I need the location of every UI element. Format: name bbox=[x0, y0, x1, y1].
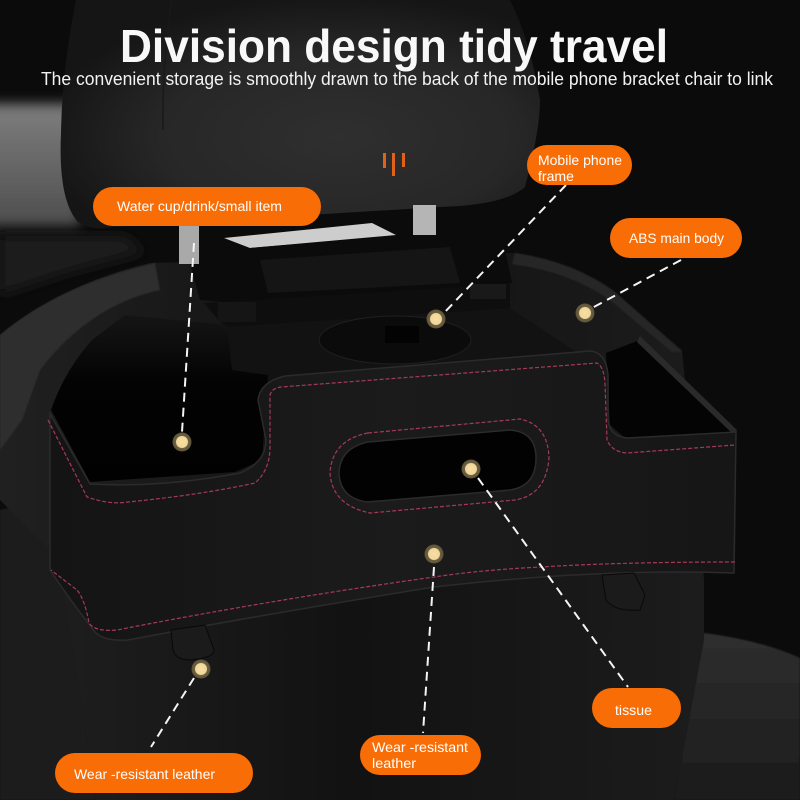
tissue slot bbox=[330, 419, 549, 513]
subtitle: The convenient storage is smoothly drawn to the back of the mobile phone bracket chair to link bbox=[41, 69, 774, 89]
callout: ABS main body bbox=[610, 218, 742, 258]
callout: ABS main body: ABS main body bbox=[629, 230, 724, 246]
marker dots bbox=[172, 304, 594, 678]
seat back bbox=[0, 253, 704, 800]
stitching bbox=[48, 363, 735, 630]
callout: mobile phone frame bbox=[527, 145, 632, 185]
callout: mobile phone frame: frame bbox=[538, 168, 574, 184]
hanging hooks bbox=[171, 573, 645, 660]
phone frame platform and dial bbox=[227, 308, 578, 400]
callout: tissue bbox=[592, 688, 681, 728]
callout: mobile phone frame: Mobile phone bbox=[538, 152, 622, 168]
phone bracket and headrest posts bbox=[135, 205, 512, 328]
headrest bbox=[61, 0, 540, 229]
callout: water cup: Water cup/drink/small item bbox=[117, 198, 282, 214]
callout: wear-resistant leather, left bbox=[55, 753, 253, 793]
callout: tissue: tissue bbox=[615, 702, 652, 718]
callout: wear-resistant leather, centre: leather bbox=[372, 755, 416, 771]
title: Division design tidy travel bbox=[120, 20, 668, 72]
callout: wear-resistant leather, centre bbox=[360, 735, 481, 775]
organizer: left cup and right cup interior bbox=[51, 315, 737, 482]
organizer: leather front panel bbox=[48, 351, 736, 640]
callout: wear-resistant leather, centre: Wear -resistant bbox=[372, 739, 468, 755]
logo mark on headrest bbox=[383, 153, 405, 176]
callout: water cup bbox=[93, 187, 321, 226]
callout: wear-resistant leather, left: Wear -resistant leather bbox=[74, 766, 215, 782]
dashed leader lines bbox=[151, 185, 681, 747]
